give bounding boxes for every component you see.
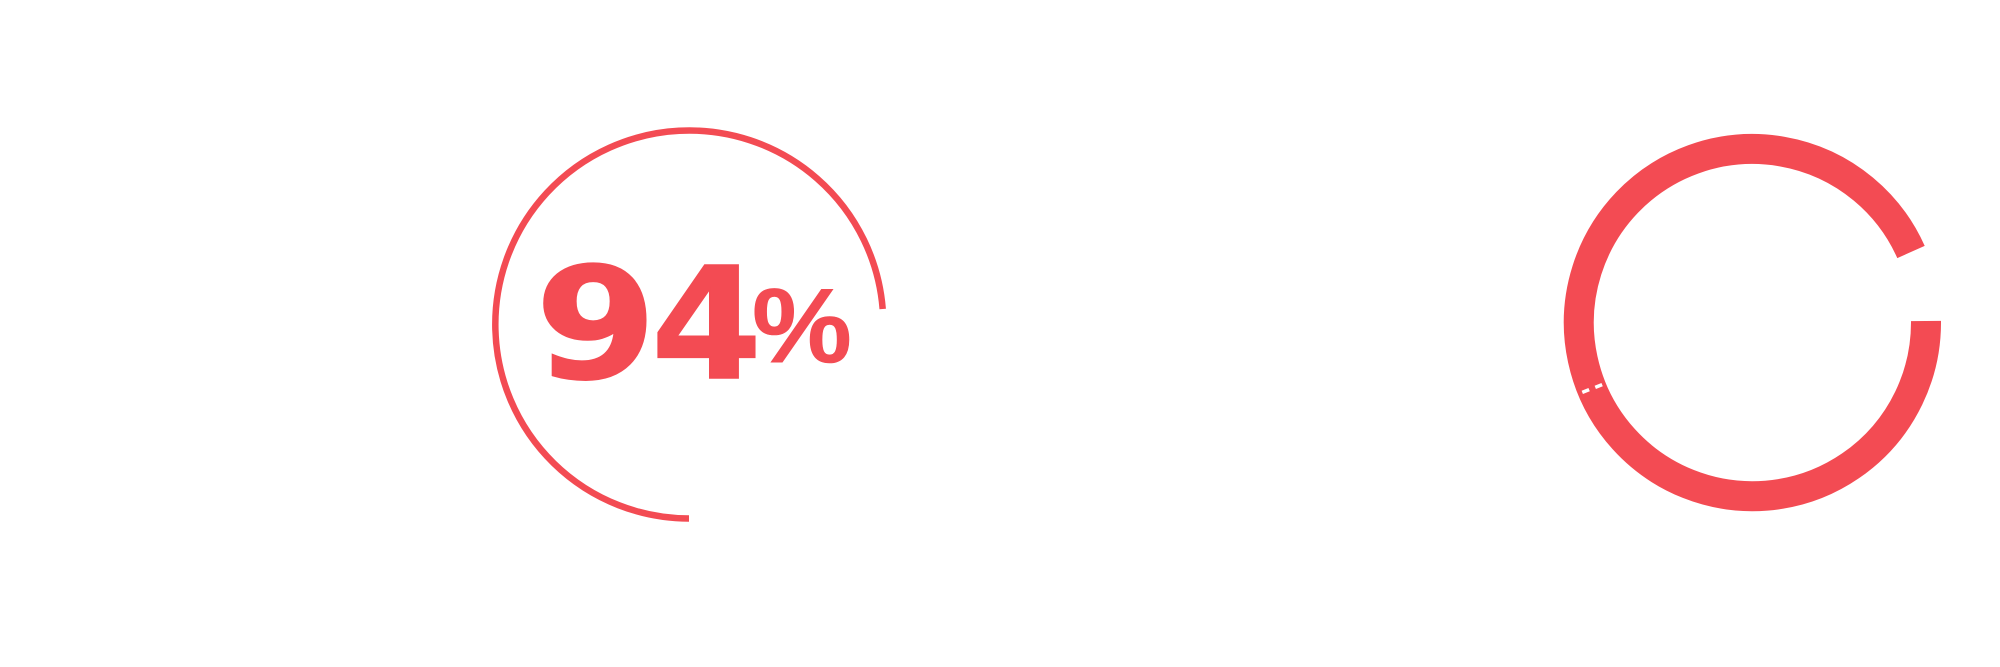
- white tick marks on ring: [1582, 383, 1603, 394]
- statistic: 94%: %: [752, 267, 852, 385]
- statistic: 94%: 9: [535, 235, 657, 415]
- thick progress ring: [1579, 149, 1926, 496]
- panel: thick ring: [1579, 149, 1926, 496]
- statistic: 94%: [535, 235, 852, 415]
- thin progress ring: [495, 131, 883, 518]
- statistic: 94%: 4: [651, 235, 762, 415]
- panel: thin ring with 94% statistic: [495, 131, 883, 518]
